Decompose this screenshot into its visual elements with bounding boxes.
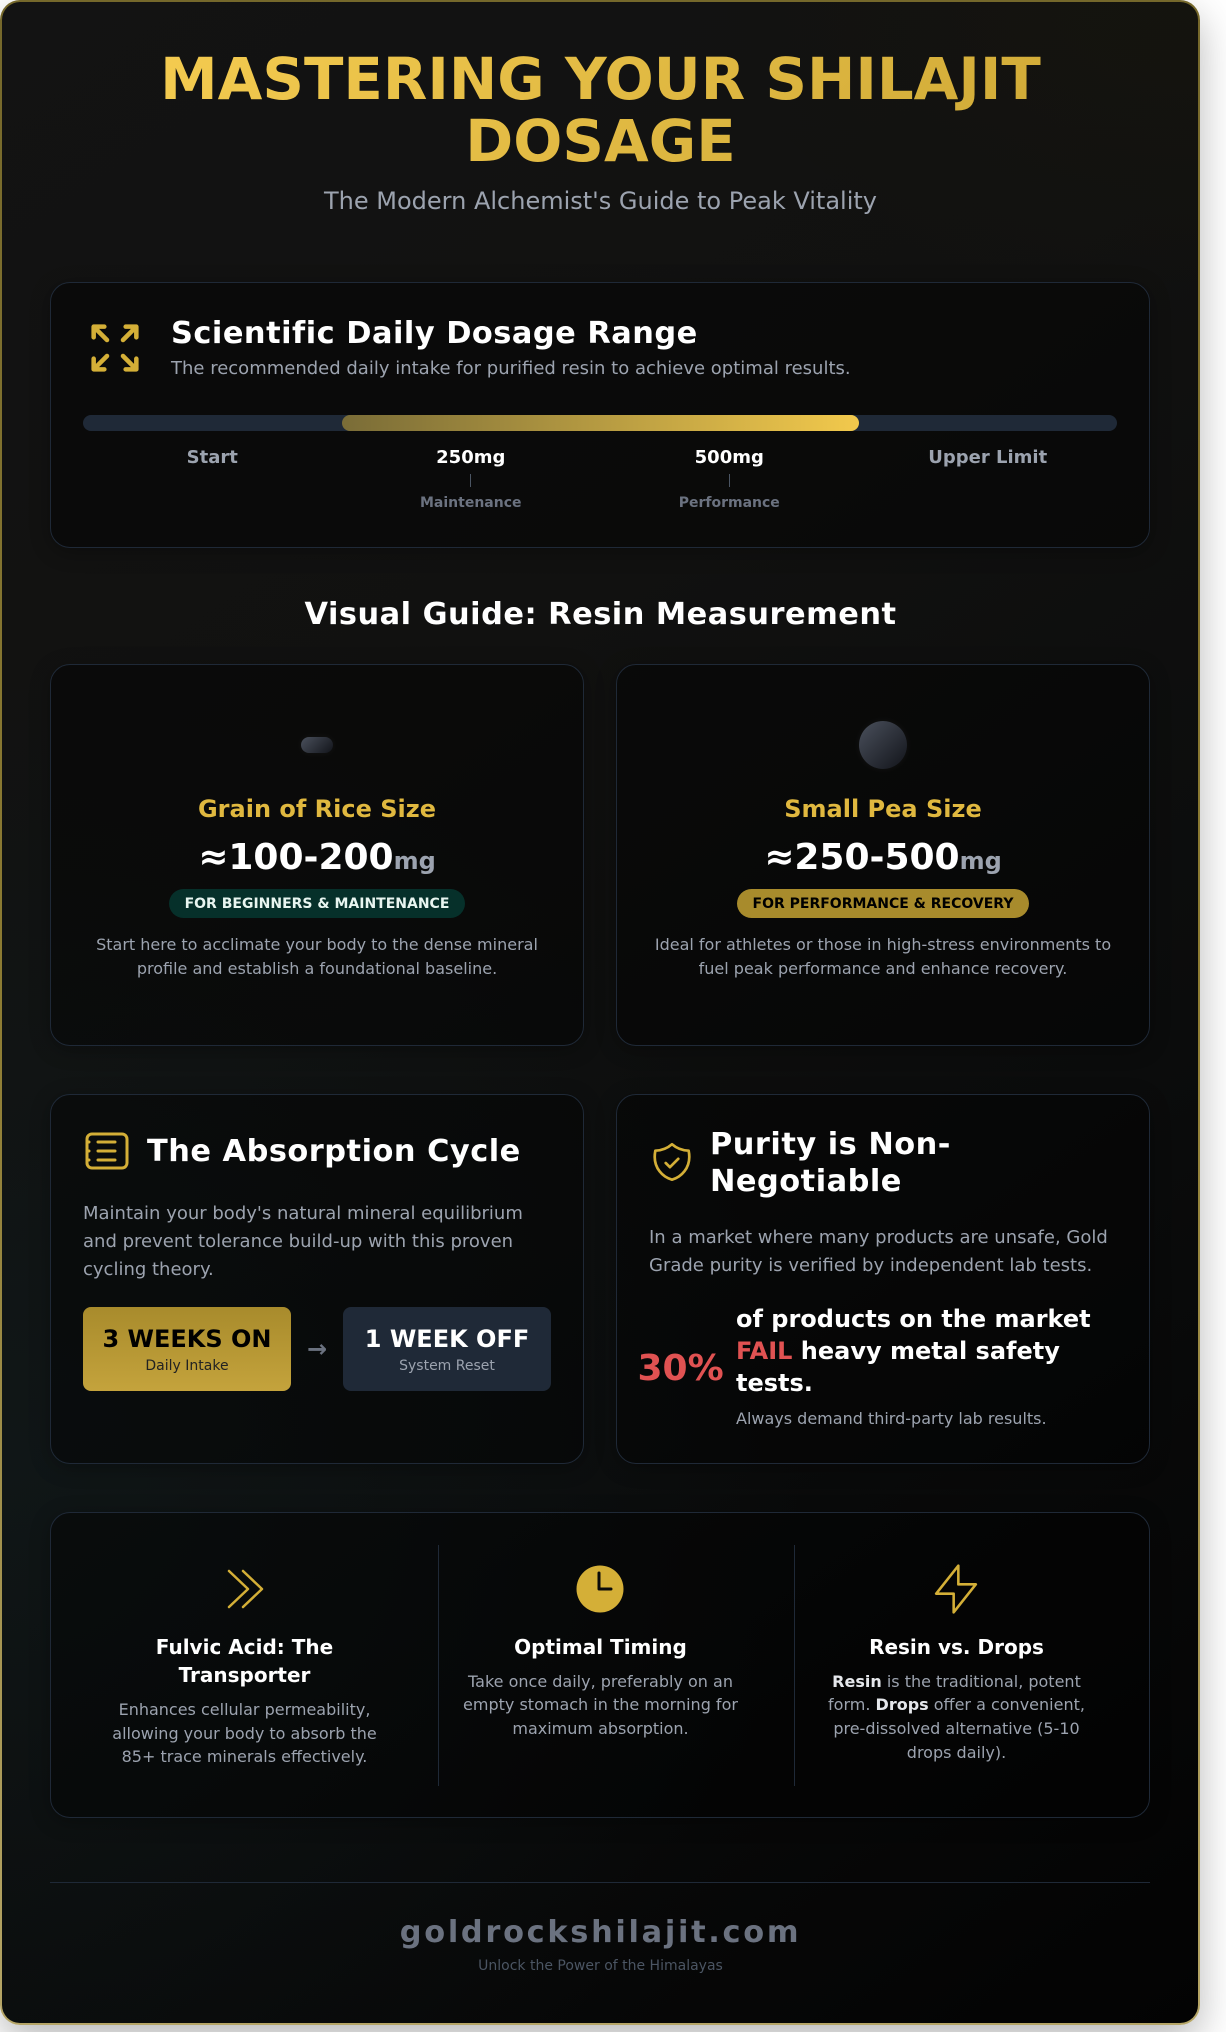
heading: dosage range: Scientific Daily Dosage Range: [171, 316, 698, 351]
label: 500mg performance: [679, 446, 780, 510]
footer: tagline: Unlock the Power of the Himalayas: [478, 1958, 723, 1974]
heading: resin vs drops: Resin vs. Drops: [869, 1635, 1044, 1659]
label: start: Start: [187, 446, 238, 468]
dosage bar: [83, 415, 1117, 431]
panel: daily dosage range: [50, 282, 1150, 548]
icon: cycle list: [86, 1132, 128, 1170]
heading: fulvic acid: Transporter: [179, 1663, 310, 1687]
text: timing: Take once daily, preferably on an: [468, 1672, 733, 1690]
label: 500mg performance: 500mg: [695, 446, 764, 468]
text: absorption description: and prevent tolerance build-up with this proven: [83, 1231, 513, 1252]
box: 3 weeks on: [83, 1307, 291, 1391]
text: absorption description: [83, 1203, 523, 1280]
box: 1 week off: [343, 1307, 551, 1391]
badge: beginners: FOR BEGINNERS & MAINTENANCE: [185, 896, 449, 912]
arrow: →: [307, 1335, 327, 1363]
text: resin vs drops: Resin is the traditional, potent: [832, 1672, 1081, 1690]
text: purity description: [649, 1227, 1108, 1276]
subtitle: The Modern Alchemist's Guide to Peak Vitality: [324, 187, 877, 215]
icon: shield check: [653, 1142, 691, 1181]
text: timing: maximum absorption.: [512, 1719, 689, 1738]
panel: key facts: [50, 1512, 1150, 1818]
divider: [438, 1545, 439, 1786]
footer: website: goldrockshilajit.com: [400, 1915, 801, 1950]
badge: performance: [737, 889, 1029, 918]
dose: 100-200mg: ≈100-200mg: [198, 837, 436, 878]
icon: lightning bolt: [934, 1564, 978, 1614]
text: resin vs drops: form. Drops offer a convenient,: [828, 1695, 1085, 1714]
text: dosage range description: The recommended daily intake for purified resin to achieve optimal results.: [171, 358, 851, 379]
box: 1 week off: System Reset: [399, 1358, 495, 1374]
label: 250mg maintenance: [420, 446, 522, 510]
text: fulvic acid: allowing your body to absorb the: [112, 1724, 377, 1743]
badge: beginners: [169, 889, 465, 918]
heading: visual guide: Visual Guide: Resin Measurement: [304, 596, 897, 632]
heading: purity: Negotiable: [710, 1164, 902, 1199]
title: [160, 45, 1041, 175]
icon: expand arrows: [91, 324, 139, 372]
heading: purity: [710, 1127, 951, 1199]
badge: performance: FOR PERFORMANCE & RECOVERY: [753, 896, 1013, 912]
text: purity description: In a market where many products are unsafe, Gold: [649, 1227, 1108, 1248]
heading: purity: Purity is Non-: [710, 1127, 951, 1162]
footer rule: [50, 1882, 1150, 1883]
note: lab results: Always demand third-party lab results.: [736, 1409, 1047, 1428]
panel: absorption cycle: [50, 1094, 584, 1464]
text: timing: [463, 1672, 738, 1738]
heading: timing: Optimal Timing: [514, 1635, 687, 1659]
stat text: of products on the market: [736, 1305, 1091, 1333]
text: pea description: fuel peak performance and enhance recovery.: [699, 959, 1067, 978]
icon: rice grain: [301, 737, 333, 753]
icon: pea: [859, 721, 907, 769]
title: MASTERING YOUR SHILAJIT: [160, 45, 1041, 113]
text: rice description: profile and establish a foundational baseline.: [137, 959, 497, 978]
text: resin vs drops: pre-dissolved alternative (5-10: [833, 1719, 1080, 1738]
icon: clock: [576, 1566, 624, 1612]
title: DOSAGE: [465, 107, 736, 175]
heading: fulvic acid: Fulvic Acid: The: [156, 1635, 333, 1659]
heading: rice size: Grain of Rice Size: [198, 795, 436, 823]
text: fulvic acid: [112, 1700, 377, 1766]
text: rice description: [96, 935, 538, 978]
heading: absorption cycle: The Absorption Cycle: [147, 1134, 521, 1169]
text: pea description: Ideal for athletes or those in high-stress environments to: [655, 935, 1111, 954]
label: 250mg maintenance: 250mg: [436, 446, 505, 468]
label: 500mg performance: Performance: [679, 494, 780, 510]
divider: [794, 1545, 795, 1786]
dosage bar: optimal range fill: [342, 415, 858, 431]
text: purity description: Grade purity is verified by independent lab tests.: [649, 1255, 1092, 1276]
label: upper limit: Upper Limit: [928, 446, 1047, 468]
stat: 30 percent: 30%: [638, 1348, 724, 1389]
column: timing: [463, 1566, 738, 1738]
text: absorption description: Maintain your body's natural mineral equilibrium: [83, 1203, 523, 1224]
text: fulvic acid: Enhances cellular permeability,: [119, 1700, 370, 1719]
text: resin vs drops: drops daily).: [907, 1743, 1006, 1762]
stat text: FAIL heavy metal safety: [736, 1337, 1060, 1365]
box: 3 weeks on: 3 WEEKS ON: [102, 1325, 272, 1353]
label: 250mg maintenance: Maintenance: [420, 494, 522, 510]
column: resin vs drops: [828, 1564, 1085, 1762]
panel: small pea: [616, 664, 1150, 1046]
text: absorption description: cycling theory.: [83, 1259, 214, 1280]
column: fulvic acid: [112, 1570, 377, 1766]
text: pea description: [655, 935, 1111, 978]
stat text: [736, 1305, 1091, 1397]
panel: grain of rice: [50, 664, 584, 1046]
heading: fulvic acid: [156, 1635, 333, 1687]
text: rice description: Start here to acclimate your body to the dense mineral: [96, 935, 538, 954]
stat text: tests.: [736, 1369, 813, 1397]
text: resin vs drops: [828, 1672, 1085, 1762]
box: 1 week off: 1 WEEK OFF: [365, 1325, 529, 1353]
dose: 250-500mg: ≈250-500mg: [764, 837, 1002, 878]
panel: purity: [616, 1094, 1150, 1464]
text: timing: empty stomach in the morning for: [463, 1695, 738, 1714]
box: 3 weeks on: Daily Intake: [145, 1358, 229, 1374]
icon: double chevron: [228, 1570, 264, 1608]
text: fulvic acid: 85+ trace minerals effectively.: [122, 1747, 367, 1766]
heading: pea size: Small Pea Size: [784, 795, 982, 823]
